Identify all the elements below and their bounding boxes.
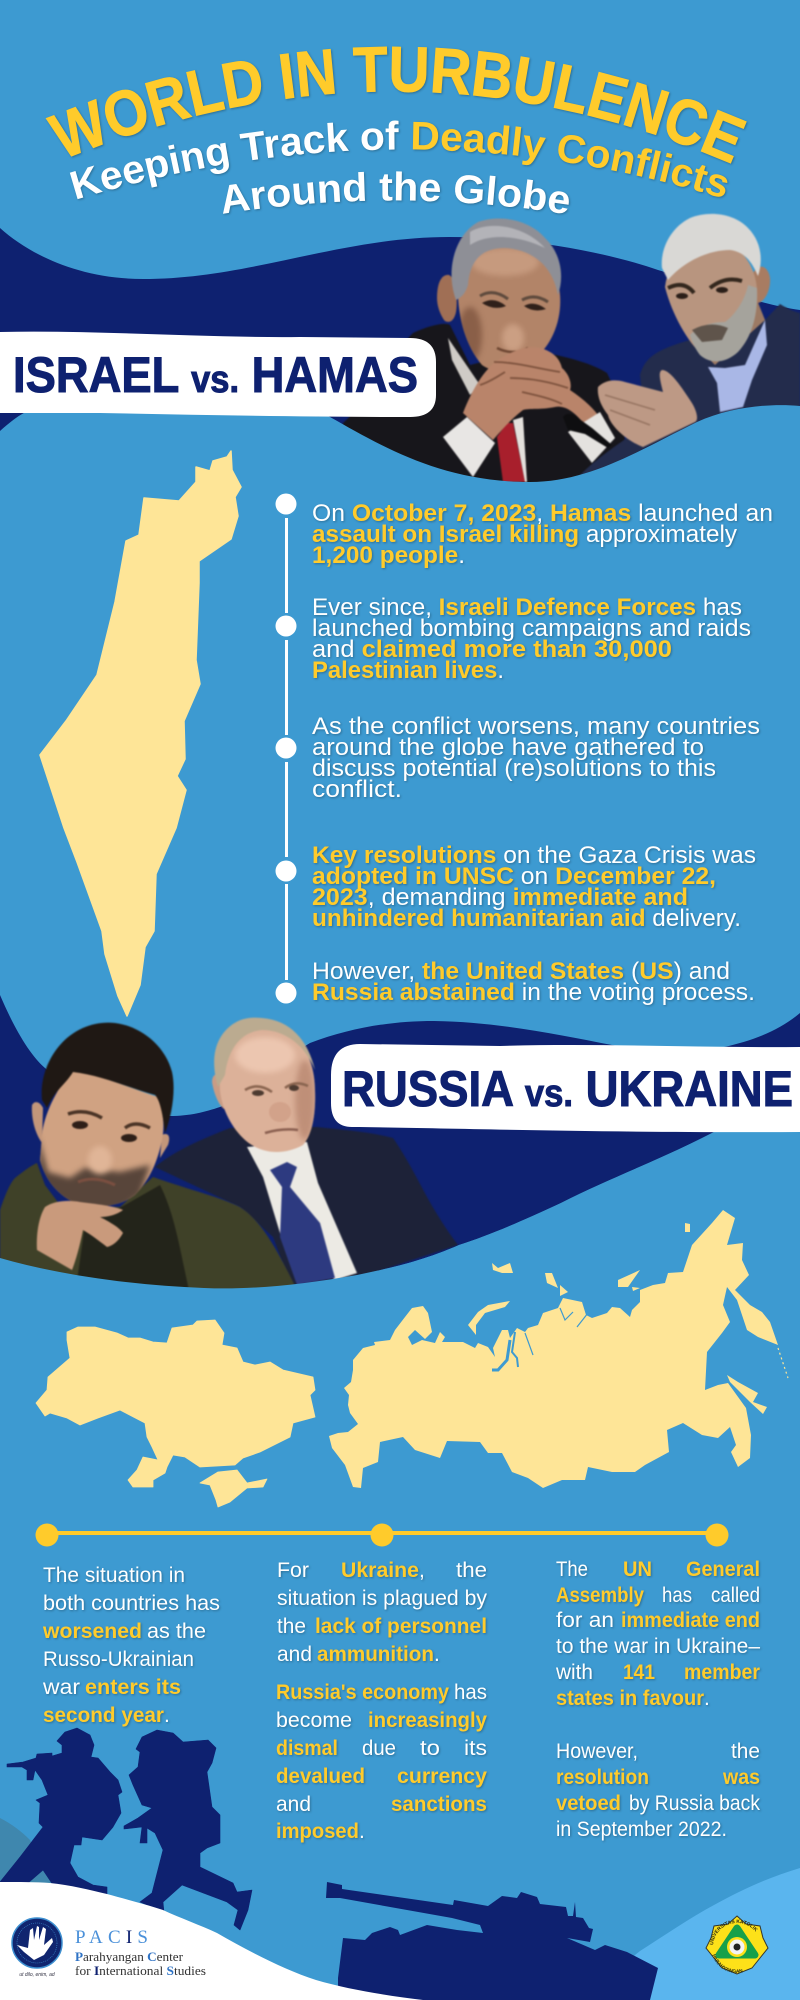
paragraph 4: Key resolutions on the Gaza Crisis was (312, 842, 756, 869)
title and subtitle arcs (46, 46, 748, 216)
text column 3: UN General Assembly: 141 (623, 1661, 655, 1684)
paragraph 4: unhindered humanitarian aid delivery. (312, 905, 741, 932)
text column 3: UN General Assembly: states in favour (556, 1687, 704, 1710)
text column 3: UN General Assembly: the (731, 1740, 760, 1763)
logo text: PACIS: Parahyangan Center (75, 1949, 184, 1964)
text column 1: situation: worsened (42, 1620, 142, 1643)
logo: PACIS emblem (12, 1918, 62, 1978)
text column 2: Ukraine and Russia: imposed (276, 1820, 359, 1843)
paragraph 5 (312, 958, 755, 1006)
paragraph 1: assault on Israel killing approximately (312, 521, 737, 548)
text column 1: situation: war (42, 1676, 80, 1699)
text column 2: Ukraine and Russia: due (362, 1737, 396, 1760)
icon: soldier silhouette 2 (124, 1730, 252, 1930)
text column 3: UN General Assembly: . (704, 1687, 710, 1710)
text column 3: UN General Assembly: by Russia back (629, 1792, 760, 1815)
photo: Putin (155, 1018, 458, 1290)
paragraph 4: adopted in UNSC on December 22, (312, 863, 716, 890)
text column 3: UN General Assembly: in September 2022. (556, 1818, 727, 1841)
map: Israel (40, 451, 241, 1016)
text column 2: Ukraine and Russia: Ukraine (341, 1559, 419, 1582)
logo: university seal: UNIVERSITAS KATOLIK (710, 1920, 758, 1945)
paragraph 1: On October 7, 2023, Hamas launched an (312, 500, 773, 527)
text column 3: UN General Assembly: However, (556, 1740, 638, 1763)
text column 2: Ukraine and Russia: become (276, 1709, 352, 1732)
text column 2: Ukraine and Russia: . (434, 1643, 440, 1666)
photo: Netanyahu (343, 219, 625, 490)
text column 3: UN General Assembly: has (662, 1584, 692, 1607)
text column 1: situation: The situation in (43, 1564, 185, 1587)
text column 3: UN General Assembly: member (684, 1661, 760, 1684)
shape: muted wave bottom left (0, 1818, 52, 1885)
paragraph 3 (312, 713, 760, 803)
light-blue section: lower section covering the photos (0, 1115, 800, 2000)
text column 2: Ukraine and Russia: and (276, 1793, 311, 1816)
text column 2: Ukraine and Russia: , (419, 1559, 425, 1582)
paragraph 1 (312, 500, 773, 569)
paragraph 3: conflict. (312, 776, 402, 803)
text column 3: UN General Assembly: immediate end (621, 1609, 760, 1632)
text column 2: Ukraine and Russia: sanctions (391, 1793, 487, 1816)
text column 1: situation: second year (43, 1704, 164, 1727)
logo: university seal (705, 1915, 769, 1974)
text column 2: Ukraine and Russia: . (359, 1820, 365, 1843)
navy wave: Russia vs Ukraine (0, 995, 800, 1288)
paragraph 2: launched bombing campaigns and raids (312, 615, 751, 642)
subtitle line 2: Around the Globe (223, 171, 571, 216)
text column 2: Ukraine and Russia: devalued (276, 1765, 365, 1788)
text column 2: Ukraine and Russia: currency (397, 1765, 487, 1788)
text column 3: UN General Assembly: UN (623, 1558, 652, 1581)
text column 2: Ukraine and Russia: its (464, 1737, 487, 1760)
paragraph 5: Russia abstained in the voting process. (312, 979, 755, 1006)
banner: Israel vs Hamas: ISRAEL vs. HAMAS (13, 347, 418, 403)
text column 2: Ukraine and Russia: situation is plagued by (277, 1587, 487, 1610)
text column 1: situation: . (164, 1704, 170, 1727)
paragraph 2: Ever since, Israeli Defence Forces has (312, 594, 742, 621)
text column 2: Ukraine and Russia: lack of personnel (315, 1615, 487, 1638)
text column 1: situation: enters its (85, 1676, 181, 1699)
timeline: three yellow nodes (36, 1524, 728, 1546)
text column 1: situation (42, 1564, 220, 1727)
text column 1: situation: both countries has (43, 1592, 220, 1615)
logo text: PACIS (75, 1927, 206, 1978)
text: Israel-Hamas narrative (312, 500, 773, 1006)
logo: university seal: PARAHYANGAN (712, 1954, 743, 1973)
paragraph 3: As the conflict worsens, many countries (312, 713, 760, 740)
paragraph 4 (312, 842, 756, 932)
logo text: PACIS: for International Studies (75, 1963, 206, 1978)
text column 1: situation: Russo-Ukrainian (43, 1648, 194, 1671)
shape: white wave bottom left (0, 1882, 423, 2000)
photo: Zelensky (0, 1023, 297, 1295)
text column 2: Ukraine and Russia: has (454, 1681, 487, 1704)
text column 3: UN General Assembly: for an (556, 1609, 614, 1632)
text column 2: Ukraine and Russia: ammunition (317, 1643, 434, 1666)
map: Ukraine (36, 1320, 315, 1507)
text column 3: UN General Assembly: resolution (556, 1766, 649, 1789)
text column 3: UN General Assembly: with (555, 1661, 593, 1684)
logo text: PACIS: PAC I S (75, 1927, 148, 1948)
paragraph 4: 2023, demanding immediate and (312, 884, 688, 911)
timeline: Israel-Hamas events (276, 494, 296, 1004)
light-blue section: lower wave covering the photos (0, 388, 800, 1100)
paragraph 3: discuss potential (re)solutions to this (312, 755, 716, 782)
icon: soldier silhouette 1 (0, 1728, 122, 1895)
paragraph 1: 1,200 people. (312, 542, 465, 569)
photo: Sinwar (580, 214, 800, 480)
main title: WORLD IN TURBULENCE (46, 46, 748, 166)
text column 2: Ukraine and Russia: dismal (276, 1737, 338, 1760)
text column 2: Ukraine and Russia: to (420, 1737, 440, 1760)
text column 1: situation: as the (147, 1620, 206, 1643)
banner: Russia vs Ukraine (331, 1044, 800, 1132)
text column 2: Ukraine and Russia: increasingly (368, 1709, 487, 1732)
text column 3: UN General Assembly: was (722, 1766, 760, 1789)
text column 2: Ukraine and Russia: the (277, 1615, 306, 1638)
text column 2: Ukraine and Russia: For (277, 1559, 309, 1582)
text column 3: UN General Assembly: vetoed (556, 1792, 621, 1815)
paragraph 5: However, the United States (US) and (312, 958, 730, 985)
text column 3: UN General Assembly: General (686, 1558, 760, 1581)
text column 2: Ukraine and Russia (276, 1559, 487, 1843)
paragraph 2 (312, 594, 751, 684)
paragraph 3: around the globe have gathered to (312, 734, 704, 761)
text column 3: UN General Assembly: called (711, 1584, 760, 1607)
text column 2: Ukraine and Russia: Russia's economy (276, 1681, 449, 1704)
banner: Israel vs Hamas (0, 332, 436, 417)
shape: light-blue wave bottom right (610, 1868, 800, 2000)
text column 3: UN General Assembly: to the war in Ukraine– (556, 1635, 760, 1658)
paragraph 2: Palestinian lives. (312, 657, 504, 684)
text column 2: Ukraine and Russia: the (456, 1559, 487, 1582)
map: Russia (329, 1210, 788, 1488)
subtitle line 1: Keeping Track of Deadly Conflicts (70, 120, 730, 201)
text column 3: UN General Assembly: The (556, 1558, 588, 1581)
navy wave: Israel vs Hamas (0, 228, 800, 500)
logo: PACIS emblem: ut dilo, enim, ad (19, 1972, 55, 1978)
text column 3: UN General Assembly (555, 1558, 760, 1841)
text column 2: Ukraine and Russia: and (277, 1643, 312, 1666)
text column 3: UN General Assembly: Assembly (556, 1584, 644, 1607)
paragraph 2: and claimed more than 30,000 (312, 636, 672, 663)
icon: tank silhouette (326, 1882, 658, 2000)
